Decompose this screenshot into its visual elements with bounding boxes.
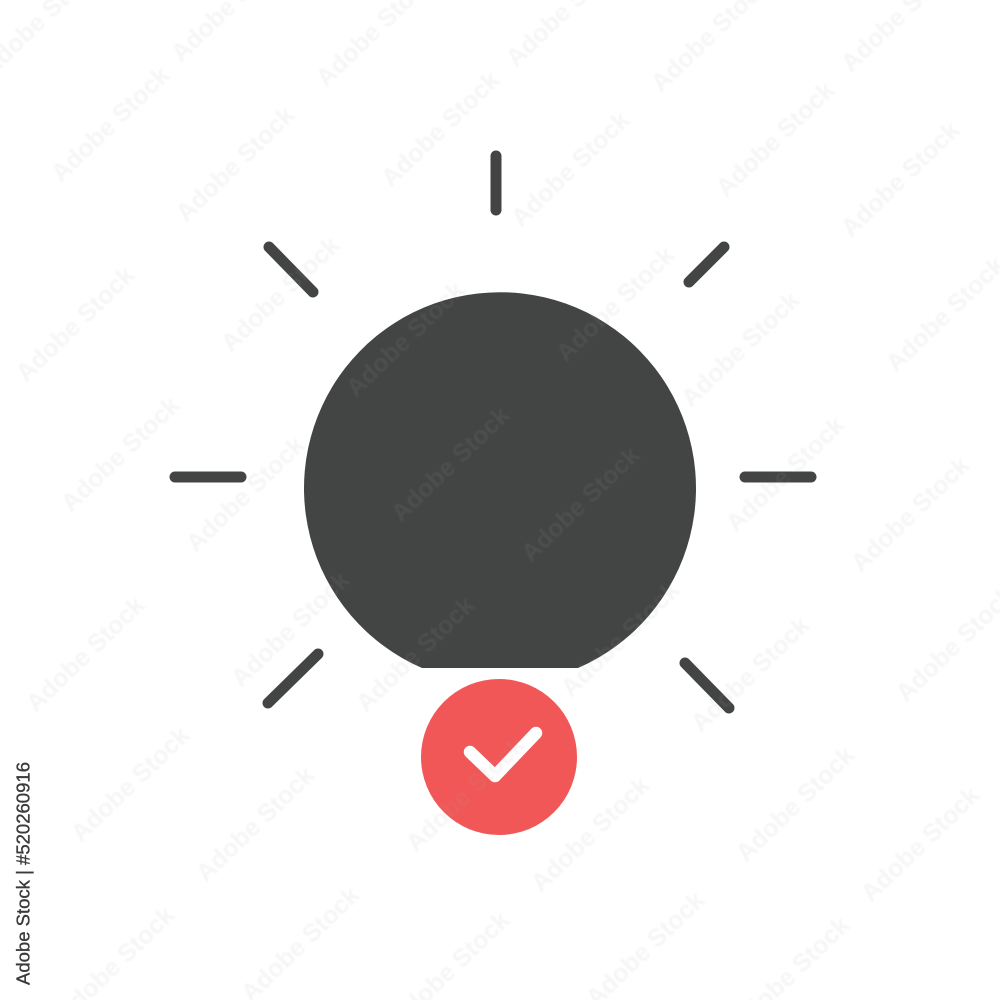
watermark pattern: Adobe Stock (526, 771, 655, 897)
watermark pattern: Adobe Stock (836, 116, 965, 242)
watermark pattern: Adobe Stock (46, 61, 175, 187)
watermark pattern: Adobe Stock (401, 731, 530, 857)
watermark pattern: Adobe Stock (556, 576, 685, 702)
watermark pattern: Adobe Stock (181, 431, 310, 557)
watermark pattern: Adobe Stock (341, 276, 470, 402)
watermark pattern: Adobe Stock (376, 66, 505, 192)
watermark pattern: Adobe Stock (711, 76, 840, 202)
watermark pattern: Adobe Stock (856, 781, 985, 907)
watermark pattern: Adobe Stock (516, 441, 645, 567)
watermark pattern: Adobe Stock (686, 611, 815, 737)
watermark pattern: Adobe Stock (721, 411, 850, 537)
watermark pattern: Adobe Stock (676, 286, 805, 412)
watermark pattern: Adobe Stock (386, 401, 515, 527)
watermark pattern: Adobe Stock (11, 261, 140, 387)
watermark pattern: Adobe Stock (171, 101, 300, 227)
icon: sun rays (175, 156, 811, 708)
watermark pattern: Adobe Stock (351, 591, 480, 717)
watermark pattern: Adobe Stock (226, 566, 355, 692)
watermark pattern: Adobe Stock (731, 741, 860, 867)
watermark pattern: Adobe Stock (191, 761, 320, 887)
stock id label: Adobe Stock | #520260916 (12, 762, 34, 985)
icon: red check badge (421, 679, 577, 835)
watermark pattern: Adobe Stock (846, 451, 975, 577)
watermark pattern: Adobe Stock (216, 231, 345, 357)
watermark pattern: Adobe Stock (21, 591, 150, 717)
watermark pattern: Adobe Stock (551, 241, 680, 367)
watermark pattern: Adobe Stock (66, 721, 195, 847)
icon: sun disc with flat bottom (304, 292, 696, 668)
watermark pattern: Adobe Stock (56, 391, 185, 517)
watermark pattern: Adobe Stock (506, 106, 635, 232)
